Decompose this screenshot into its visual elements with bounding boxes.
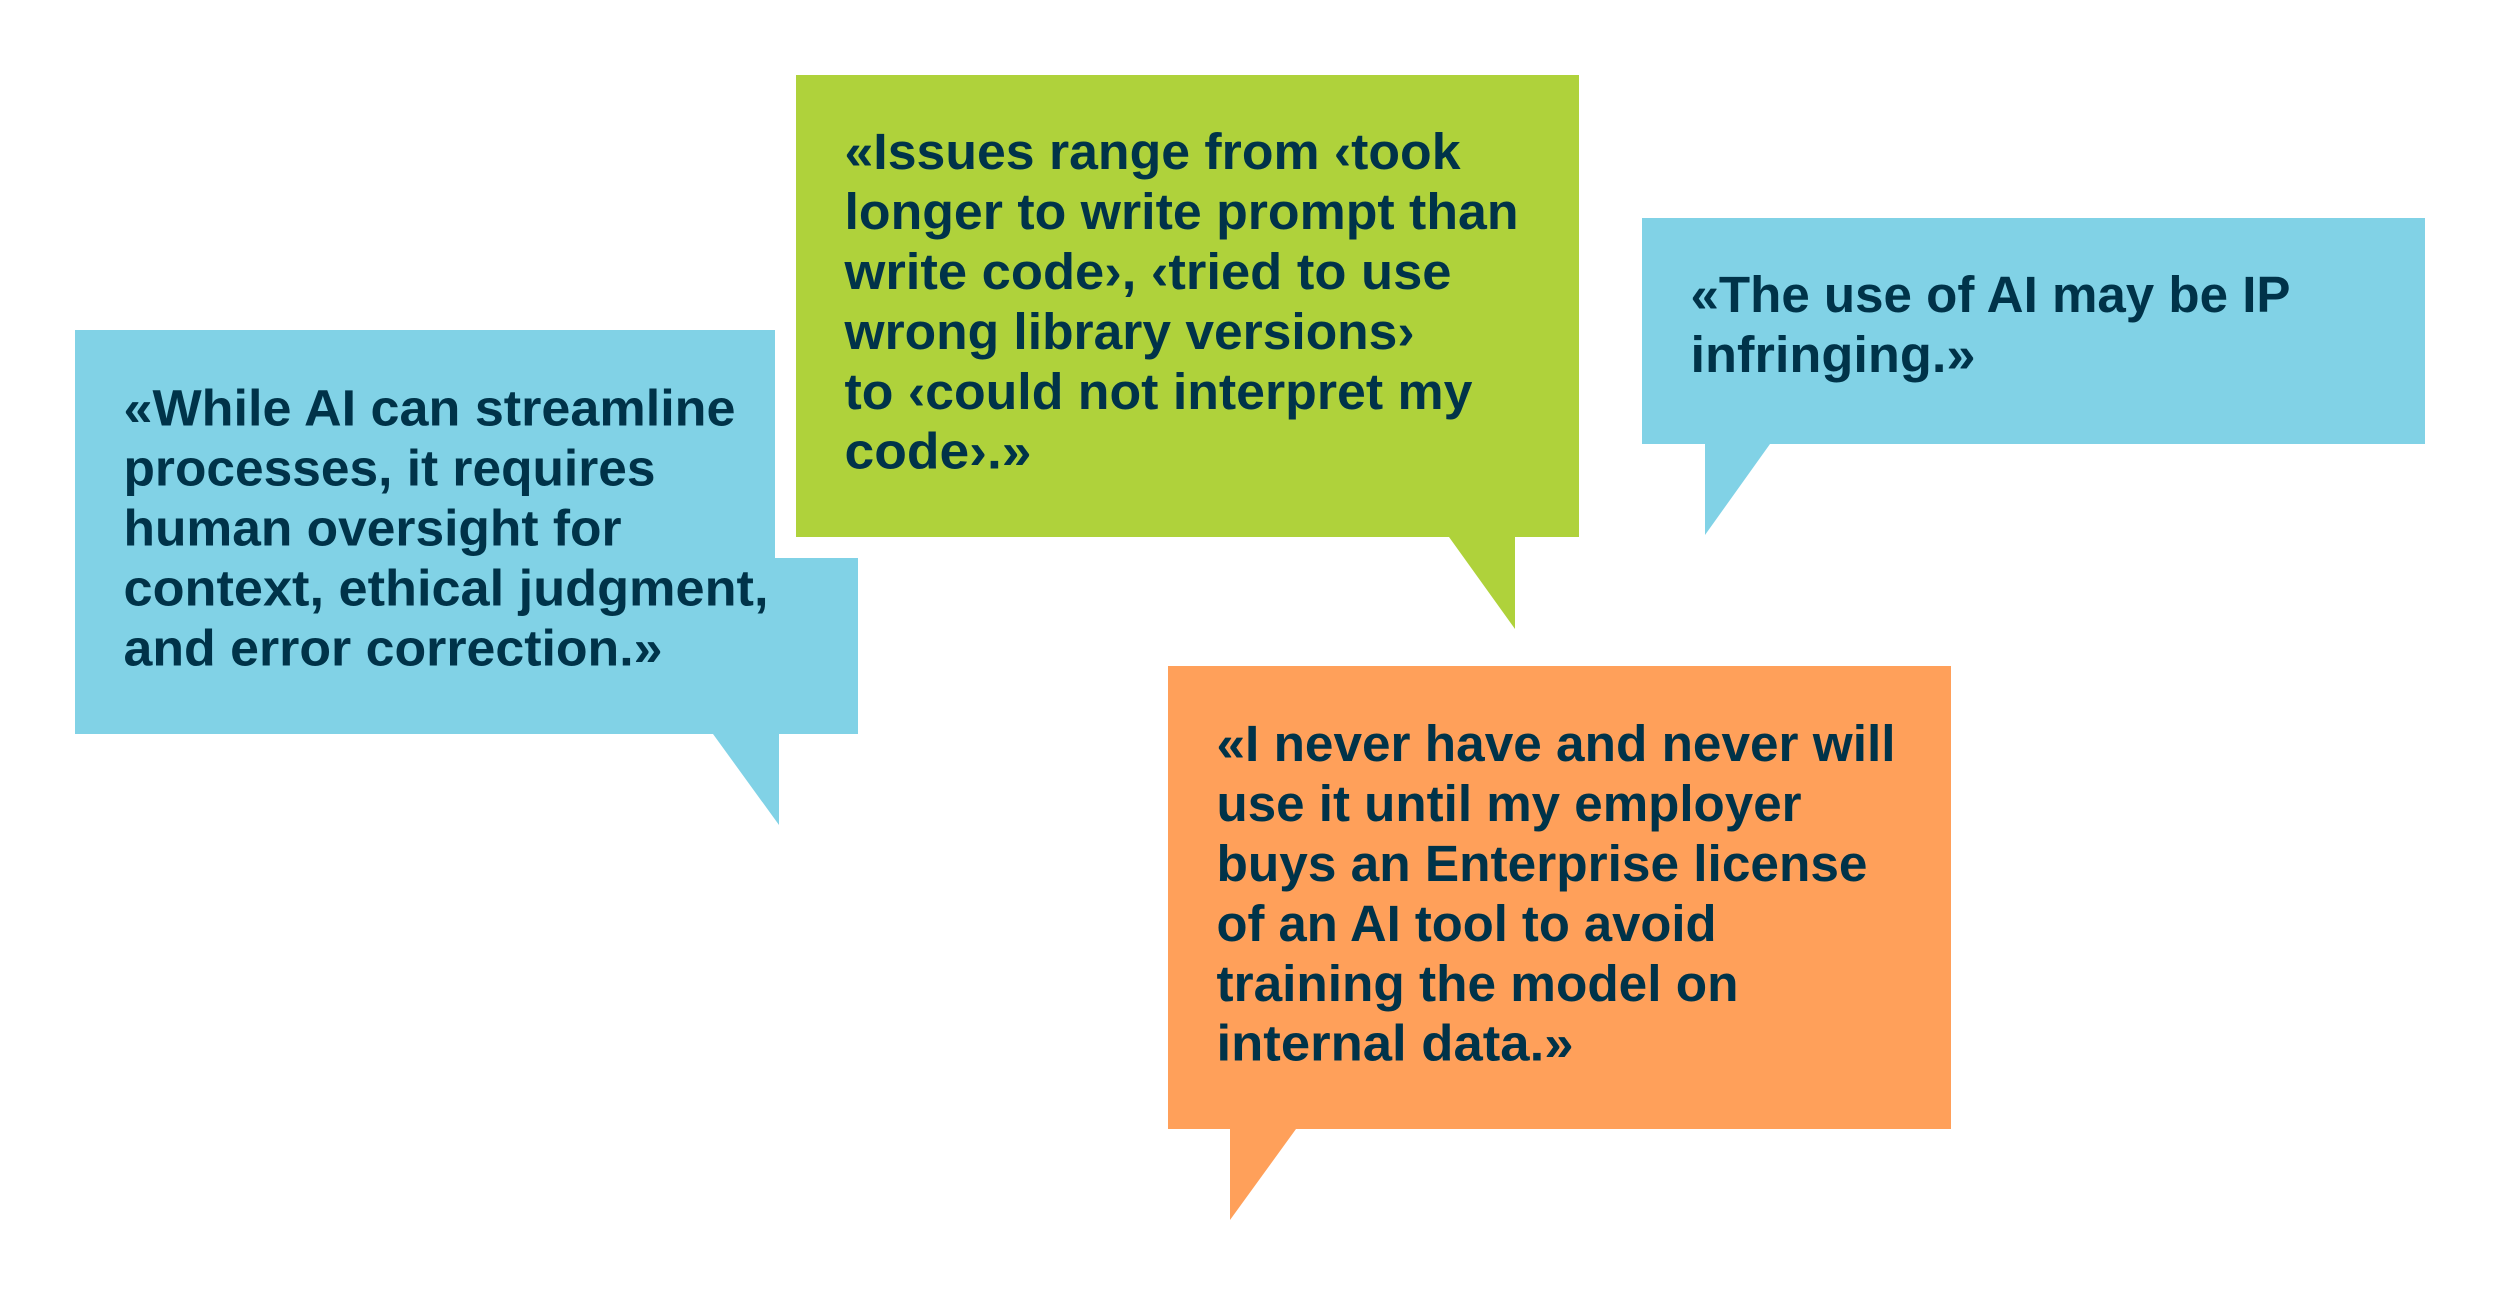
quote text: buys an Enterprise license xyxy=(1216,835,1868,892)
bubble shape with tail xyxy=(1642,218,2425,535)
quote text: «While AI can streamline xyxy=(124,380,736,436)
panel: green quote bubble, top centre xyxy=(796,75,1579,629)
bubble shape with tail xyxy=(75,330,858,825)
quote text xyxy=(124,380,768,676)
quote text: wrong library versions› xyxy=(843,303,1414,360)
quote text: code›.» xyxy=(844,422,1032,480)
panel: orange quote bubble, bottom centre xyxy=(1168,666,1951,1220)
quote text: «The use of AI may be IP xyxy=(1690,266,2290,323)
bubble shape with tail xyxy=(1168,666,1951,1220)
quote text: context, ethical judgment, xyxy=(124,560,768,616)
quote text: write code›, ‹tried to use xyxy=(843,243,1452,300)
quote text xyxy=(843,123,1518,480)
quote text: to ‹could not interpret my xyxy=(844,363,1473,420)
quote text: «Issues range from ‹took xyxy=(844,123,1461,180)
quote text xyxy=(1216,715,1896,1072)
quote text: of an AI tool to avoid xyxy=(1216,895,1716,952)
quote text: «I never have and never will xyxy=(1216,715,1896,772)
quote text xyxy=(1690,266,2290,383)
quote text: human oversight for xyxy=(124,500,622,556)
panel: blue quote bubble, top right xyxy=(1642,218,2425,535)
quote text: internal data.» xyxy=(1216,1014,1574,1072)
quote text: use it until my employer xyxy=(1216,775,1802,832)
quote text: processes, it requires xyxy=(124,440,656,496)
panel: blue quote bubble, left xyxy=(75,330,858,825)
quote text: training the model on xyxy=(1216,955,1738,1012)
bubble shape with tail xyxy=(796,75,1579,629)
quote text: and error correction.» xyxy=(124,620,662,676)
quote text: infringing.» xyxy=(1690,326,1976,383)
quote text: longer to write prompt than xyxy=(844,183,1518,240)
